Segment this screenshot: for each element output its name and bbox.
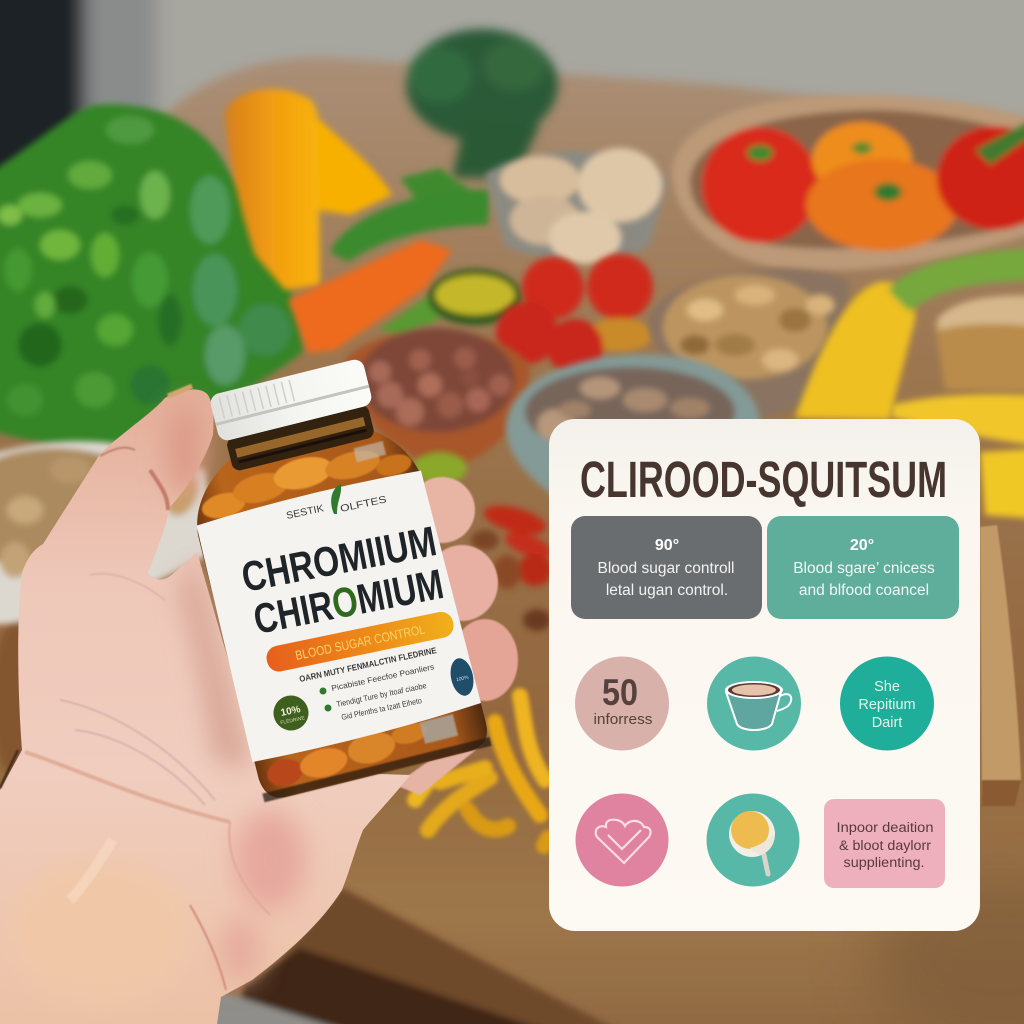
icon: egg on spoon xyxy=(706,794,800,886)
small tomatoes xyxy=(496,254,653,375)
blue badge: 100% xyxy=(456,675,470,683)
carrots upper xyxy=(225,89,392,290)
note box: pink xyxy=(824,799,945,888)
circle: text: She xyxy=(874,679,900,695)
yellow squash xyxy=(795,248,1024,420)
supplement bottle xyxy=(164,350,492,803)
green badge: FLEDRINE xyxy=(280,715,306,726)
capsules in upper glass xyxy=(196,433,414,522)
bottle glass body xyxy=(181,412,492,802)
label fine print: Picabiste Feecfoe Poanliers xyxy=(331,662,435,693)
left bowl with nuts xyxy=(0,441,215,625)
stat card: gray: 90° xyxy=(655,537,679,554)
note box: pink: supplienting. xyxy=(844,855,924,870)
circle: 50 stat xyxy=(575,656,669,750)
mushroom bowl xyxy=(485,148,668,264)
brand line with leaf xyxy=(285,484,388,522)
cheese block xyxy=(935,295,1024,392)
dark bottle neck xyxy=(225,404,375,472)
circle: 50 stat: inforress xyxy=(594,712,652,728)
circle: text: Repitium xyxy=(858,697,916,713)
wooden cutting board xyxy=(980,525,1021,806)
broccoli xyxy=(406,29,558,178)
vegetable bowl with tomatoes and peppers xyxy=(672,95,1024,271)
stat card: teal: and blfood coancel xyxy=(799,582,929,599)
knuckle and skin creases xyxy=(0,386,270,990)
bottle label text xyxy=(238,484,477,734)
label fine print: Gid Pfenths ta Izatt Eiheto xyxy=(341,696,423,722)
note box: pink: & bloot daylorr xyxy=(839,838,932,853)
stat card: gray xyxy=(571,516,762,619)
orange banner: BLOOD SUGAR CONTROL xyxy=(294,621,426,663)
white label xyxy=(193,466,482,765)
nut bowl xyxy=(648,269,850,418)
circle: 50 stat: 50 xyxy=(602,672,638,713)
capsules in lower glass xyxy=(254,705,492,802)
icon: heart check xyxy=(576,794,668,886)
red peppers and small items xyxy=(413,452,554,631)
wall backdrop xyxy=(0,0,1024,220)
stat card: gray: letal ugan control. xyxy=(606,582,728,599)
carrot sticks and zucchini xyxy=(288,240,522,353)
hand holding the bottle xyxy=(0,386,410,1024)
circle: text xyxy=(840,656,934,750)
bean bowl xyxy=(345,328,530,468)
hand shading xyxy=(10,404,306,1000)
green badge: 10% xyxy=(280,704,302,719)
stat card: teal: 20° xyxy=(850,537,874,554)
table front edge and floor xyxy=(0,610,625,1024)
green badge xyxy=(270,692,312,734)
stat card: gray: Blood sugar controll xyxy=(598,560,734,577)
product name line one: CHROMIIUM xyxy=(238,517,440,601)
stat card: teal: Blood sgare’ cnicess xyxy=(793,560,935,577)
green beans xyxy=(330,168,490,262)
product name line two: CHIROMIUM xyxy=(250,560,447,643)
yellow pasta pile xyxy=(415,696,548,846)
gray bowl with nuts xyxy=(506,354,760,500)
orange banner xyxy=(264,610,456,674)
fingers behind the bottle xyxy=(395,477,518,795)
icon: cup xyxy=(707,656,801,750)
lettuce xyxy=(0,104,303,447)
stat card: teal xyxy=(767,516,959,619)
brand line with leaf: OLFTES xyxy=(339,494,388,515)
circle: text: Dairt xyxy=(872,715,902,731)
label fine print: Tiendigt Ture by Itoaf ciaobe xyxy=(336,681,428,709)
bananas xyxy=(892,394,1024,520)
note box: pink: Inpoor deaition xyxy=(836,820,934,835)
table lower right shading xyxy=(870,870,1024,1024)
label fine print: OARN MUTY FENMALCTIN FLEDRINE xyxy=(298,645,438,684)
blue badge xyxy=(447,656,477,698)
brand line with leaf: SESTIK xyxy=(285,503,325,522)
panel: info card xyxy=(549,419,980,931)
label fine print xyxy=(298,645,438,722)
bottle cap xyxy=(209,358,373,442)
